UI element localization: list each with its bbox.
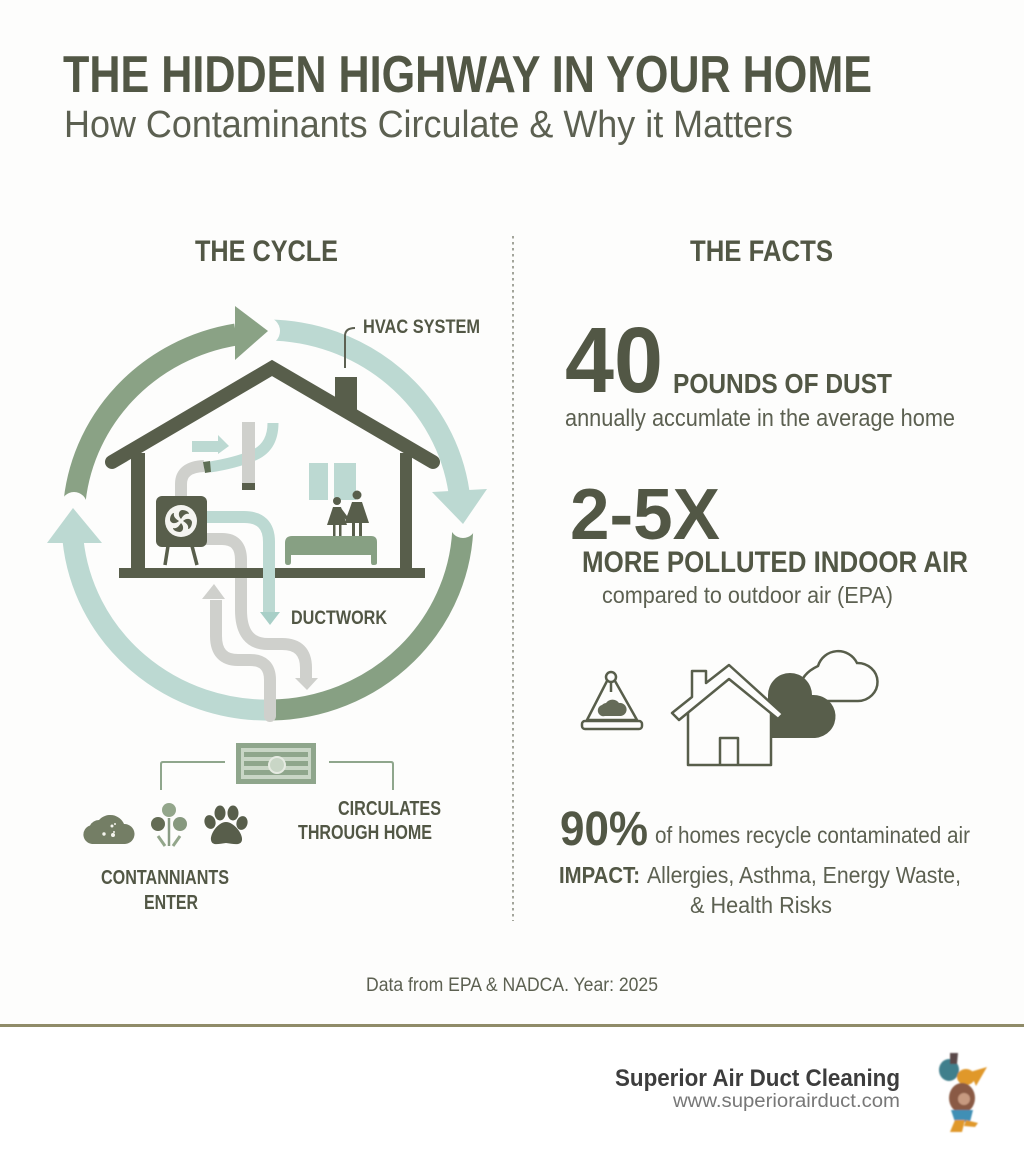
label: ductwork: DUCTWORK [291, 608, 387, 629]
icon: pollen plant [151, 803, 187, 846]
footer rule [0, 1024, 1024, 1027]
teal supply duct [192, 423, 280, 625]
title: THE HIDDEN HIGHWAY IN YOUR HOME [63, 45, 872, 103]
icon: duck mascot [939, 1053, 987, 1132]
fact: 2-5x more polluted: compared to outdoor air (EPA) [602, 582, 893, 608]
hvac unit [156, 496, 207, 565]
icon: clouds [768, 651, 878, 738]
connector: right bracket [329, 762, 393, 790]
label: circulates through home [298, 798, 441, 844]
bed [285, 536, 377, 565]
fact: 90 percent [560, 803, 970, 856]
ductwork: gray return ducts [181, 466, 318, 715]
connector: left bracket [161, 762, 225, 790]
source note: Data from EPA & NADCA. Year: 2025 [366, 975, 658, 996]
fact: 2-5x more polluted [570, 475, 968, 608]
brand url: www.superiorairduct.com [672, 1091, 900, 1112]
icon: air scale [582, 672, 642, 729]
heading: the facts: THE FACTS [690, 235, 833, 268]
label: contaminants enter: ENTER [144, 892, 198, 914]
impact text: IMPACT: [559, 862, 640, 888]
house [112, 368, 433, 578]
footer background [0, 1027, 1024, 1154]
window [309, 463, 356, 500]
fact: 40 pounds of dust: POUNDS OF DUST [673, 368, 892, 399]
label: contaminants enter: CONTANNIANTS [101, 867, 229, 889]
people [327, 490, 369, 536]
icon: dust cloud [83, 815, 135, 844]
label: contaminants enter [101, 867, 229, 914]
label: hvac system [345, 317, 480, 368]
brand name: Superior Air Duct Cleaning [615, 1065, 900, 1092]
fact: 2-5x more polluted: MORE POLLUTED INDOOR AIR [582, 546, 968, 579]
label: hvac system: HVAC SYSTEM [363, 317, 480, 338]
fact: 40 pounds of dust [565, 308, 955, 432]
label: circulates through home: THROUGH HOME [298, 822, 432, 844]
fact: 40 pounds of dust: 40 [565, 308, 663, 412]
subtitle: How Contaminants Circulate & Why it Matters [64, 104, 793, 146]
icon: paw print [203, 806, 249, 844]
impact text: Allergies, Asthma, Energy Waste, [647, 862, 961, 888]
fact: 90 percent: of homes recycle contaminated air [655, 822, 970, 848]
vent grille [236, 743, 316, 784]
ductwork: bottom cap [264, 690, 276, 722]
cycle diagram [47, 306, 487, 722]
fact: 2-5x more polluted: 2-5X [570, 475, 720, 555]
impact text [559, 862, 961, 918]
circular arrows [47, 306, 487, 710]
impact text: & Health Risks [690, 892, 832, 918]
vertical gray duct [242, 422, 255, 490]
label: circulates through home: CIRCULATES [338, 798, 441, 820]
icon: house outline [672, 665, 783, 765]
heading: the cycle: THE CYCLE [195, 235, 338, 268]
fact: 40 pounds of dust: annually accumlate in the average home [565, 405, 955, 432]
fact: 90 percent: 90% [560, 803, 648, 856]
